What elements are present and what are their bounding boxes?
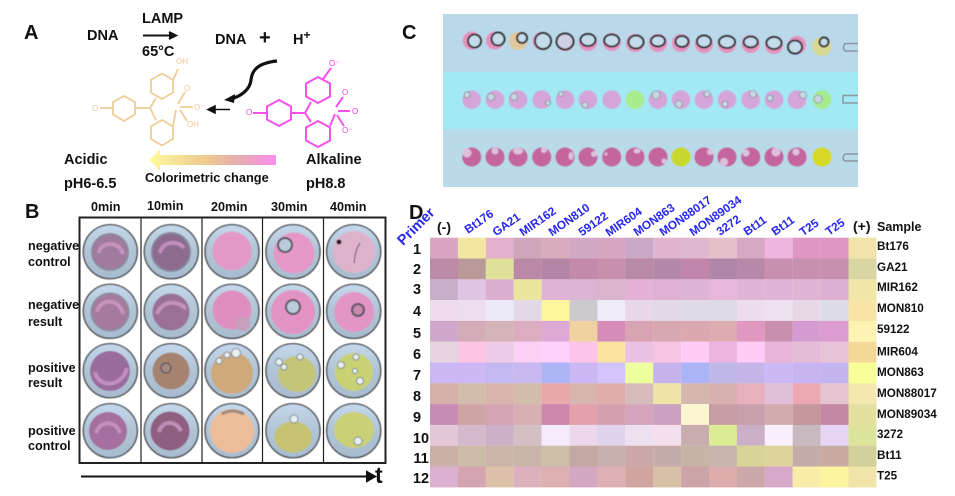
well row: negative control bbox=[83, 225, 381, 279]
sample row labels bbox=[877, 240, 937, 482]
time headers: 10min bbox=[147, 199, 183, 213]
well row: positive control bbox=[83, 404, 381, 458]
label: alkaline pH: pH8.8 bbox=[306, 176, 346, 192]
primer column labels: T25 bbox=[797, 216, 822, 239]
row labels: result bbox=[28, 376, 63, 390]
sample row labels: 59122 bbox=[877, 323, 910, 336]
row labels: negative bbox=[28, 298, 79, 312]
panel A: LAMP reaction scheme bbox=[24, 11, 362, 192]
reaction equation: 65°C bbox=[142, 44, 175, 60]
chip row 1 wells bbox=[463, 32, 831, 56]
arrow: LAMP reaction bbox=[143, 32, 176, 39]
sample row labels: 3272 bbox=[877, 428, 904, 441]
row labels: control bbox=[28, 255, 71, 269]
primer row numbers: 3 bbox=[413, 282, 421, 298]
label: alkaline pH bbox=[306, 152, 362, 192]
sample row labels: MON810 bbox=[877, 302, 924, 315]
gradient arrow: colorimetric change bbox=[149, 149, 276, 171]
panel letter A: A bbox=[24, 22, 38, 44]
panel D: colour matrix bbox=[395, 193, 937, 487]
axis title: Primer: Primer bbox=[395, 205, 439, 249]
primer column labels: 3272 bbox=[714, 212, 744, 238]
molecule: acidic form in tan: O bbox=[184, 84, 190, 93]
well row: positive result bbox=[83, 344, 381, 398]
primer row numbers: 12 bbox=[413, 471, 429, 487]
primer column labels: MON89034 bbox=[687, 193, 744, 239]
primer column labels: Bt11 bbox=[769, 212, 797, 238]
primer column labels: MIR162 bbox=[517, 204, 559, 239]
time headers bbox=[91, 199, 366, 214]
reaction equation: DNA bbox=[87, 28, 119, 44]
primer column labels bbox=[462, 193, 848, 239]
row labels bbox=[28, 239, 79, 453]
time headers: 40min bbox=[330, 200, 366, 214]
column label: negative: (-) bbox=[437, 219, 451, 235]
primer row numbers: 6 bbox=[413, 347, 421, 363]
column label: positive: (+) bbox=[853, 218, 870, 234]
primer row numbers: 9 bbox=[413, 410, 421, 426]
primer row numbers bbox=[413, 242, 429, 487]
label: acidic pH bbox=[64, 152, 116, 192]
molecule: acidic form in tan: OH bbox=[187, 120, 199, 129]
primer row numbers: 5 bbox=[413, 326, 421, 342]
primer column labels: MON810 bbox=[546, 200, 593, 239]
sample row labels: MON88017 bbox=[877, 387, 937, 400]
heatmap grid bbox=[430, 238, 876, 487]
primer row numbers: 1 bbox=[413, 242, 421, 258]
time headers: 0min bbox=[91, 200, 120, 214]
frame with column dividers bbox=[80, 218, 386, 463]
primer column labels: Bt11 bbox=[741, 212, 769, 238]
sample row labels: Bt176 bbox=[877, 240, 909, 253]
molecule: acidic form in tan bbox=[92, 57, 200, 146]
reaction equation: + bbox=[259, 27, 271, 49]
row labels: result bbox=[28, 315, 63, 329]
arrowhead of curved arrow bbox=[224, 94, 235, 103]
time arrow bbox=[81, 472, 375, 481]
small reaction arrow bbox=[208, 106, 230, 113]
reaction equation bbox=[87, 11, 310, 60]
primer column labels: MIR604 bbox=[603, 204, 645, 239]
label: acidic pH: Acidic bbox=[64, 152, 108, 168]
chip row 2 wells bbox=[462, 90, 831, 109]
molecule: acidic form in tan: O bbox=[194, 103, 200, 112]
chip row 3 wells bbox=[462, 147, 832, 166]
primer column labels: T25 bbox=[823, 215, 848, 238]
primer row numbers: 7 bbox=[413, 368, 421, 384]
molecule: alkaline form in magenta: O bbox=[352, 107, 358, 116]
label: alkaline pH: Alkaline bbox=[306, 152, 362, 168]
panel B: well time course bbox=[25, 199, 386, 488]
curved arrow: protons acting on indicator bbox=[230, 61, 277, 99]
row labels: positive bbox=[28, 361, 76, 375]
primer row numbers: 10 bbox=[413, 431, 429, 447]
molecule: alkaline form in magenta: O⁻ bbox=[342, 126, 352, 135]
column label: Sample: Sample bbox=[877, 220, 922, 234]
reaction equation: + bbox=[303, 28, 310, 42]
primer row numbers: 4 bbox=[413, 304, 421, 320]
panel C: chip photograph bbox=[402, 14, 858, 187]
primer column labels: Bt176 bbox=[462, 206, 496, 236]
sample row labels: Bt11 bbox=[877, 449, 902, 462]
chip outlet markers bbox=[843, 44, 858, 161]
molecule: alkaline form in magenta: O bbox=[342, 88, 348, 97]
primer column labels: MON88017 bbox=[657, 193, 714, 239]
sample row labels: MON863 bbox=[877, 366, 924, 379]
primer row numbers: 8 bbox=[413, 389, 421, 405]
primer row numbers: 11 bbox=[413, 451, 429, 467]
time headers: 20min bbox=[211, 200, 247, 214]
molecule: alkaline form in magenta: O⁻ bbox=[329, 59, 339, 68]
reaction equation: H bbox=[293, 32, 303, 48]
primer column labels: MON863 bbox=[631, 200, 678, 239]
row labels: control bbox=[28, 439, 71, 453]
panel letter D: D bbox=[409, 202, 423, 224]
panel letter B: B bbox=[25, 201, 39, 223]
primer column labels: GA21 bbox=[490, 210, 523, 239]
molecule: alkaline form in magenta bbox=[246, 59, 358, 147]
primer column labels: 59122 bbox=[576, 208, 611, 239]
sample row labels: MON89034 bbox=[877, 408, 937, 421]
label: colorimetric change: Colorimetric change bbox=[145, 170, 269, 185]
sample row labels: MIR162 bbox=[877, 281, 918, 294]
row labels: negative bbox=[28, 239, 79, 253]
well row: negative result bbox=[83, 284, 381, 338]
label: acidic pH: pH6-6.5 bbox=[64, 176, 116, 192]
time headers: 30min bbox=[271, 200, 307, 214]
chip background bands bbox=[443, 14, 858, 187]
sample row labels: MIR604 bbox=[877, 346, 918, 358]
reaction equation: DNA bbox=[215, 32, 247, 48]
molecule: acidic form in tan: OH bbox=[176, 57, 188, 66]
molecule: alkaline form in magenta: O bbox=[246, 108, 252, 117]
row labels: positive bbox=[28, 424, 76, 438]
sample row labels: GA21 bbox=[877, 261, 908, 274]
reaction equation: LAMP bbox=[142, 11, 183, 27]
primer row numbers: 2 bbox=[413, 262, 421, 278]
sample row labels: T25 bbox=[877, 470, 898, 482]
molecule: acidic form in tan: O bbox=[92, 104, 98, 113]
time label t: t bbox=[375, 462, 383, 488]
panel letter C: C bbox=[402, 22, 416, 44]
